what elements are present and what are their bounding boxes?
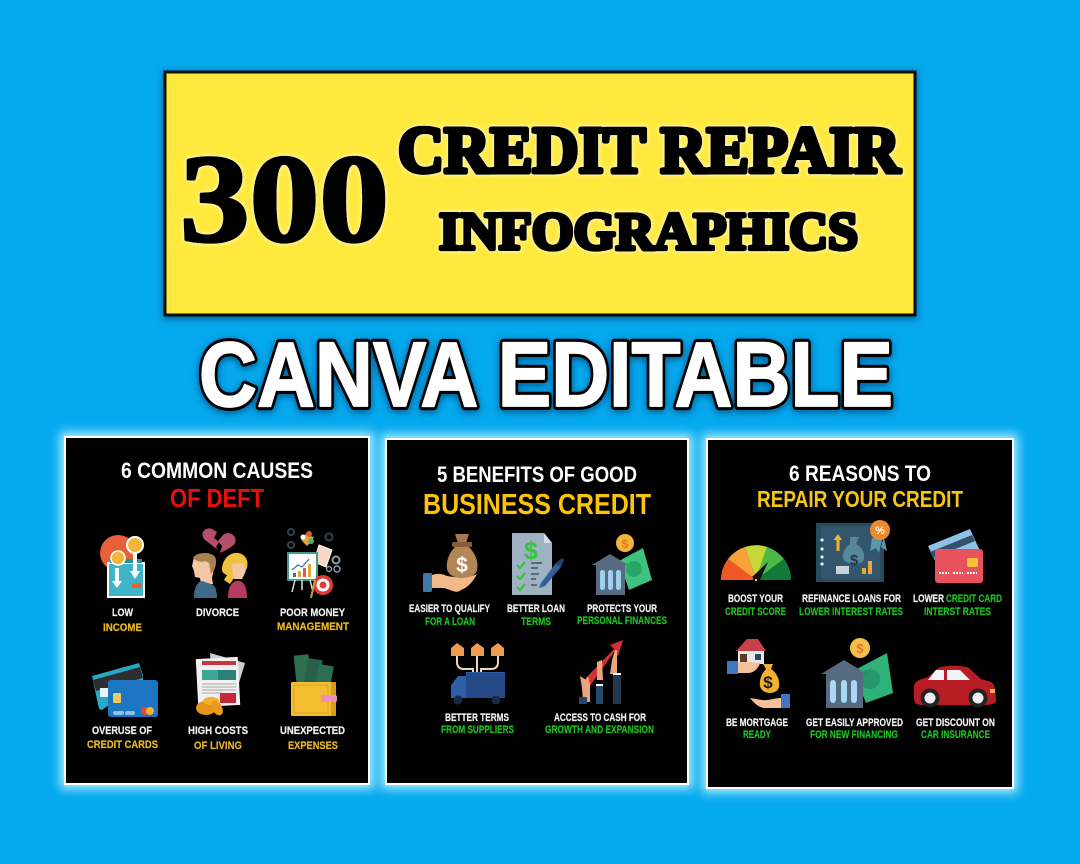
label: boost your credit score: BOOST YOUR <box>728 593 783 605</box>
icon: mortgage house and bag <box>727 639 790 708</box>
label: better terms from suppliers <box>441 712 514 736</box>
icon: checklist document with pen: $ <box>524 537 538 565</box>
label: overuse of credit cards: OVERUSE OF <box>92 725 152 737</box>
icon: credit score gauge <box>721 545 791 583</box>
title line: credit repair: CREDIT REPAIR <box>398 114 901 187</box>
title number 300: 300 <box>180 130 389 269</box>
label: be mortgage ready: READY <box>743 729 771 741</box>
label: low income: INCOME <box>103 622 142 634</box>
label: protects your personal finances: PERSONAL FINANCES <box>577 615 667 627</box>
icon: credit cards <box>92 663 158 717</box>
label: better loan terms: BETTER LOAN <box>507 603 565 615</box>
label: better loan terms <box>507 603 565 628</box>
label: get easily approved for new financing <box>806 717 903 741</box>
title line: infographics: INFOGRAPHICS <box>439 203 858 261</box>
icon: safe with money bag and badge: $ <box>850 552 859 569</box>
label: lower credit card interst rates: INTERST RATES <box>924 606 991 618</box>
label: refinance loans for lower interest rates <box>799 593 903 618</box>
label: poor money management: POOR MONEY <box>280 607 346 619</box>
label: be mortgage ready <box>726 717 788 741</box>
icon: safe with money bag and badge <box>816 520 890 582</box>
panel 1 heading: 6 COMMON CAUSES <box>121 458 313 483</box>
label: protects your personal finances: PROTECTS YOUR <box>587 603 657 615</box>
label: boost your credit score: CREDIT SCORE <box>725 606 786 618</box>
icon: bank with money: $ <box>622 537 629 551</box>
icon: red car <box>914 666 996 708</box>
panel 3 background <box>707 439 1013 788</box>
label: high costs of living <box>188 725 248 752</box>
icon: checklist document with pen <box>512 533 564 595</box>
icon: bank with money <box>592 534 652 595</box>
label: get easily approved for new financing: GET EASILY APPROVED <box>806 717 903 729</box>
panel 2 heading: BUSINESS CREDIT <box>423 489 651 521</box>
label: unexpected expenses: UNEXPECTED <box>280 725 345 737</box>
label: get discount on car insurance <box>916 717 995 741</box>
label: high costs of living: HIGH COSTS <box>188 725 248 737</box>
label: low income: LOW <box>112 607 133 619</box>
panel: 6 reasons to repair your credit <box>702 434 1018 793</box>
label: overuse of credit cards <box>87 725 158 751</box>
label: protects your personal finances <box>577 603 667 627</box>
label: better loan terms: TERMS <box>521 616 551 628</box>
panel 2 heading <box>423 462 651 521</box>
label: be mortgage ready: BE MORTGAGE <box>726 717 788 729</box>
panel 3 heading: 6 REASONS TO <box>789 461 931 486</box>
label: high costs of living: OF LIVING <box>194 740 242 752</box>
label: unexpected expenses: EXPENSES <box>288 740 338 752</box>
icon: money bag on hand: $ <box>456 554 468 577</box>
icon: poor money management <box>288 529 340 598</box>
icon: high costs of living <box>196 653 245 717</box>
label: unexpected expenses <box>280 725 345 752</box>
label: access to cash for growth and expansion <box>545 712 654 736</box>
label: poor money management: MANAGEMENT <box>277 621 349 633</box>
label: easier to qualify for a loan: EASIER TO QUALIFY <box>409 603 490 615</box>
panel 3 heading <box>757 461 963 512</box>
panel 2 heading: 5 BENEFITS OF GOOD <box>437 462 637 487</box>
panel 1 background <box>65 437 369 784</box>
icon: raised hands with rising arrow <box>579 640 623 704</box>
label: better terms from suppliers: FROM SUPPLIERS <box>441 724 514 736</box>
panel 1 heading: OF DEFT <box>170 483 264 513</box>
icon: safe with money bag and badge: % <box>875 525 885 537</box>
icon: bank with money 2 <box>821 638 893 708</box>
label: lower credit card interst rates <box>913 593 1002 618</box>
label: easier to qualify for a loan: FOR A LOAN <box>425 616 475 628</box>
heading: canva editable: CANVA EDITABLE <box>199 324 893 426</box>
label: access to cash for growth and expansion: GROWTH AND EXPANSION <box>545 724 654 736</box>
icon: truck with supplier houses <box>451 643 505 704</box>
panel 2 background <box>386 439 688 784</box>
label: overuse of credit cards: CREDIT CARDS <box>87 739 158 751</box>
label: access to cash for growth and expansion: ACCESS TO CASH FOR <box>554 712 646 724</box>
icon: credit cards blue and red <box>928 529 983 583</box>
icon: money bag on hand <box>423 534 478 592</box>
label: lower credit card interst rates: LOWER <box>913 593 944 605</box>
label: low income <box>103 607 142 634</box>
icon: mortgage house and bag: $ <box>763 673 773 692</box>
icon: bank with money 2: $ <box>856 641 864 656</box>
label: lower credit card interst rates: CREDIT CARD <box>946 593 1002 605</box>
panel 3 heading: REPAIR YOUR CREDIT <box>757 486 963 512</box>
panel: 5 benefits of good business credit <box>381 434 693 789</box>
label: get discount on car insurance: GET DISCOUNT ON <box>916 717 995 729</box>
banner: yellow title box <box>165 72 915 315</box>
label: boost your credit score <box>725 593 786 618</box>
panel: 6 common causes of deft <box>60 432 374 789</box>
label: better terms from suppliers: BETTER TERMS <box>445 712 509 724</box>
label: get discount on car insurance: CAR INSURANCE <box>921 729 990 741</box>
label: refinance loans for lower interest rates: REFINANCE LOANS FOR <box>802 593 901 605</box>
heading: canva editable: CANVA EDITABLE <box>199 324 893 426</box>
panel 1 heading <box>121 458 313 513</box>
label: refinance loans for lower interest rates: LOWER INTEREST RATES <box>799 606 903 618</box>
label: get easily approved for new financing: FOR NEW FINANCING <box>810 729 898 741</box>
label: poor money management <box>277 607 349 633</box>
icon: divorce <box>192 528 248 598</box>
label: divorce: DIVORCE <box>196 607 239 619</box>
icon: unexpected expenses <box>291 654 337 716</box>
icon: low income <box>100 535 144 597</box>
label: easier to qualify for a loan <box>409 603 490 628</box>
